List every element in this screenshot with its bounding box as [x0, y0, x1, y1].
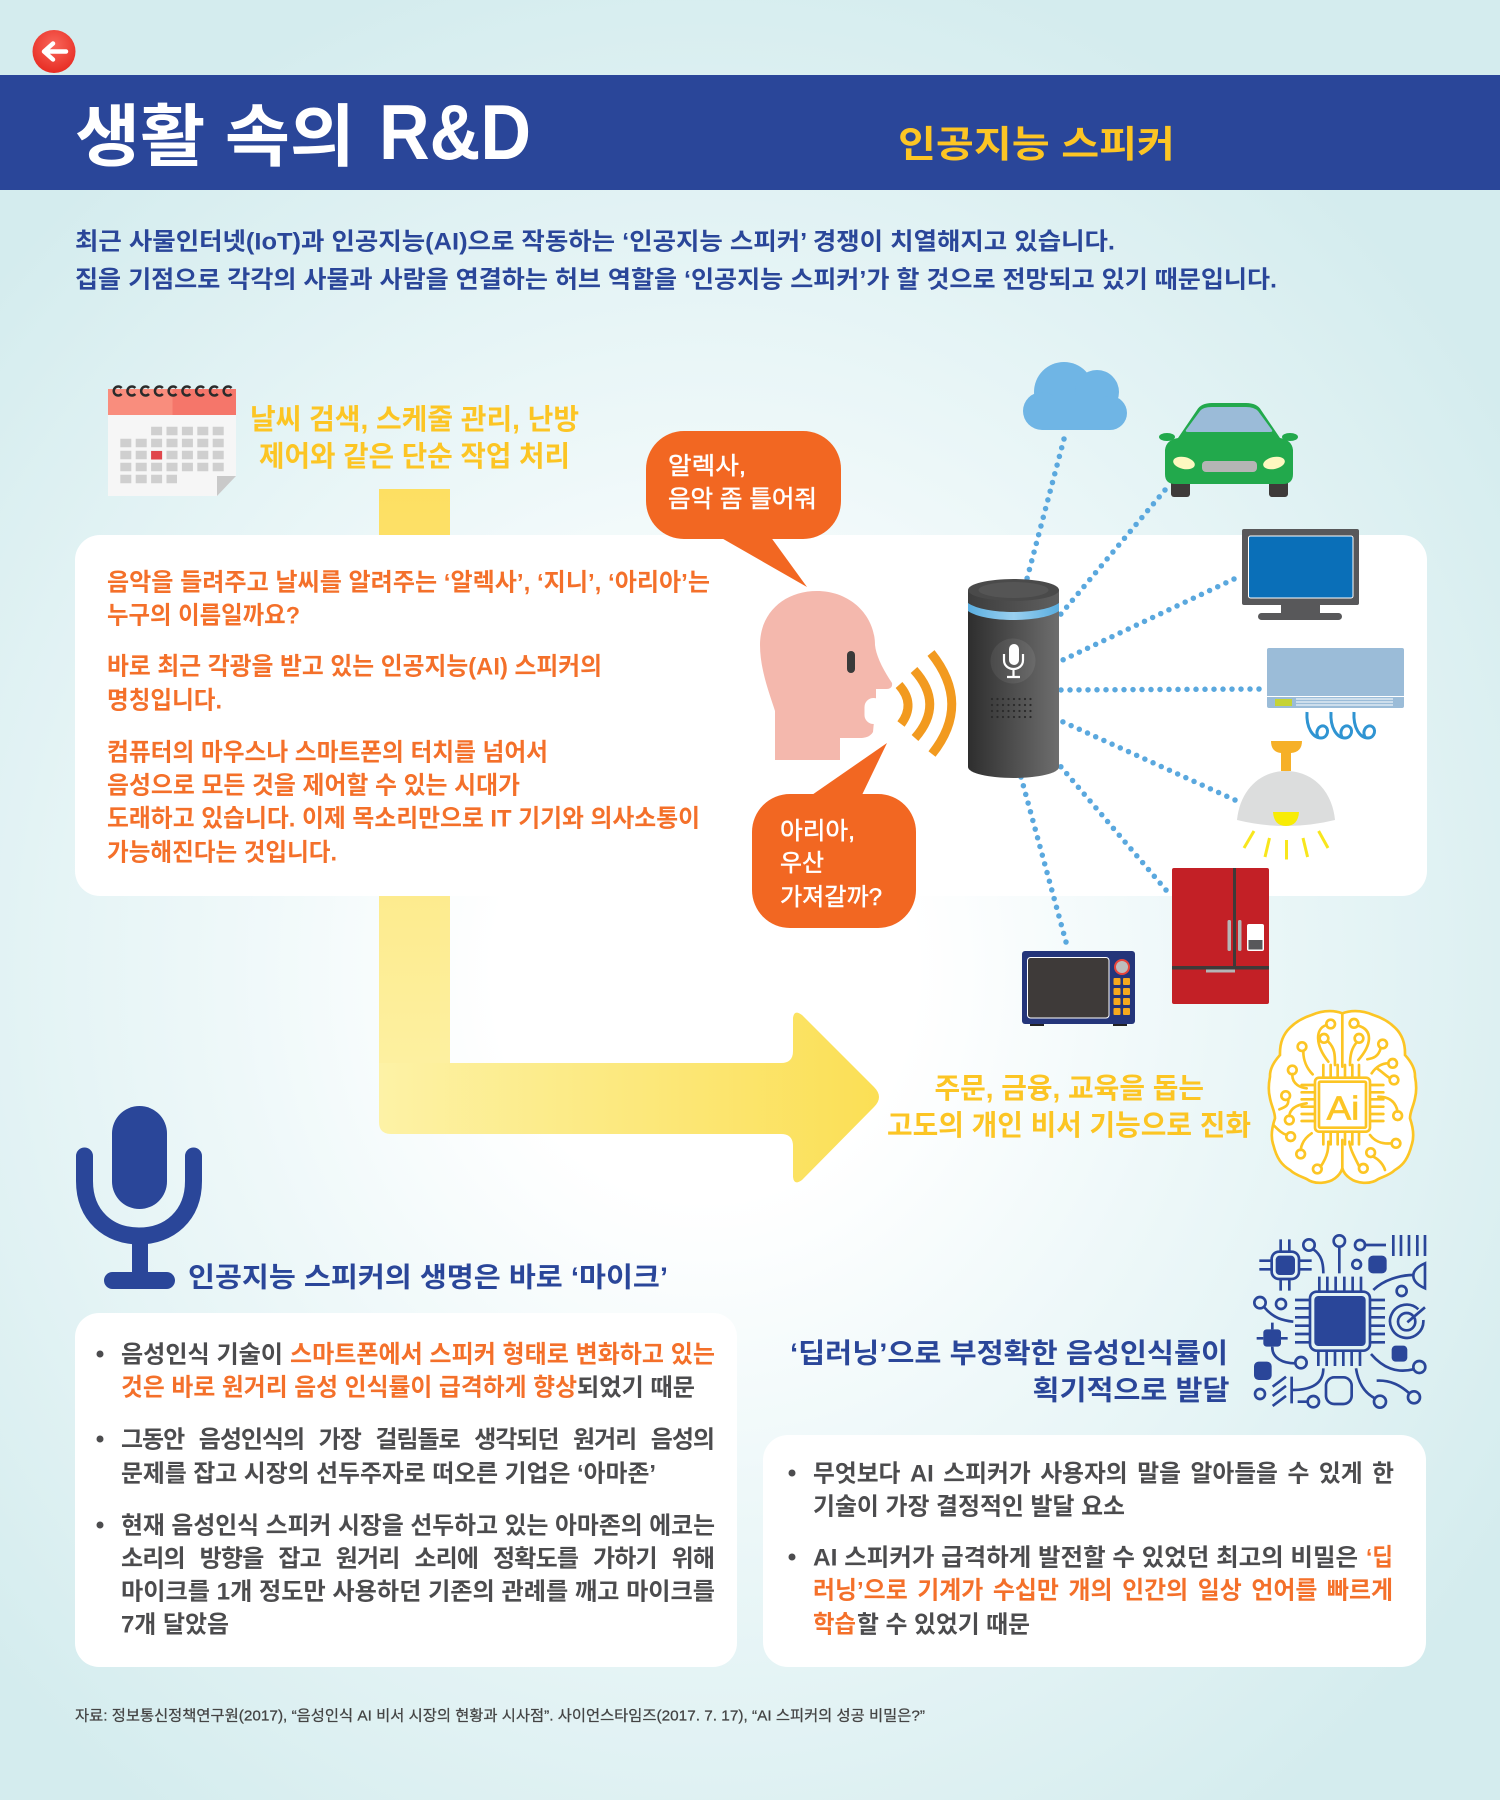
bullet: deep learning secret: 할 수 있었기 때문: [857, 1611, 1030, 1638]
heading: advanced assistant: 주문, 금융, 교육을 돕는: [934, 1073, 1204, 1105]
title: 생활 속의: [75, 99, 355, 175]
icon: ceiling lamp: [1237, 741, 1335, 860]
speech bubble: Aria: 가져갈까?: [780, 884, 882, 911]
chip label: Ai: [1327, 1090, 1359, 1127]
heading: advanced assistant: 고도의 개인 비서 기능으로 진화: [887, 1110, 1251, 1142]
bullet: key technology: 무엇보다 AI 스피커가 사용자의 말을 알아들을 수 있게 한: [813, 1460, 1394, 1487]
bullet: deep learning secret: AI 스피커가 급격하게 발전할 수 있었던 최고의 비밀은: [813, 1544, 1358, 1571]
text block: intro to AI speakers: 가능해진다는 것입니다.: [107, 838, 337, 866]
arrow: from simple tasks to personal assistant: [379, 489, 879, 1182]
text block: intro to AI speakers: 바로 최근 각광을 받고 있는 인공지능(AI) 스피커의: [107, 652, 602, 680]
header band: [0, 75, 1500, 190]
bullet: smartphone to speaker: [96, 1340, 715, 1401]
icon: microwave: [1022, 951, 1135, 1026]
icon: car: [1159, 403, 1298, 497]
icon: microphone: [84, 1106, 194, 1289]
bullet: smartphone to speaker: 음성인식 기술이: [121, 1341, 283, 1368]
bullet: deep learning secret: ‘딥: [1366, 1543, 1393, 1571]
intro text: 최근 사물인터넷(IoT)과 인공지능(AI)으로 작동하는 ‘인공지능 스피커’ 경쟁이 치열해지고 있습니다.: [75, 228, 1115, 255]
panel: deep learning details: [763, 1435, 1426, 1667]
heading: deep learning: ‘딥러닝’으로 부정확한 음성인식률이: [790, 1337, 1228, 1368]
text block: intro to AI speakers: 음성으로 모든 것을 제어할 수 있는 시대가: [107, 771, 520, 799]
text block: intro to AI speakers: 컴퓨터의 마우스나 스마트폰의 터치를 넘어서: [107, 738, 548, 766]
panel: microphone details: [75, 1313, 737, 1667]
icon: refrigerator: [1172, 868, 1269, 1004]
heading: microphone: 인공지능 스피커의 생명은 바로 ‘마이크’: [188, 1261, 668, 1292]
icon: cloud: [1023, 362, 1127, 430]
bullet: Echo: [96, 1512, 715, 1638]
source note: 자료: 정보통신정책연구원(2017), “음성인식 AI 비서 시장의 현황과 시사점”. 사이언스타임즈(2017. 7. 17), “AI 스피커의 성공 비밀은?”: [75, 1707, 925, 1724]
speech bubble: Alexa: 음악 좀 틀어줘: [668, 486, 817, 513]
heading: simple tasks: 제어와 같은 단순 작업 처리: [259, 441, 570, 473]
bullet: smartphone to speaker: 스마트폰에서 스피커 형태로 변화하고 있는: [290, 1340, 715, 1368]
speech bubble: Aria: [752, 743, 916, 928]
text block: intro to AI speakers: 도래하고 있습니다. 이제 목소리만으로 IT 기기와 의사소통이: [107, 804, 700, 832]
bullet: smartphone to speaker: 것은 바로 원거리 음성 인식률이 급격하게 향상: [121, 1373, 577, 1401]
panel: main white: [75, 535, 1427, 896]
bullet: Amazon: [96, 1426, 715, 1487]
bullet: smartphone to speaker: 되었기 때문: [577, 1374, 695, 1401]
speech bubble: Alexa: 알렉사,: [668, 453, 746, 480]
speech bubble: Aria: 아리아,: [780, 818, 855, 845]
title: R&D: [379, 88, 531, 176]
bullet: deep learning secret: [788, 1543, 1393, 1638]
heading: deep learning: 획기적으로 발달: [1032, 1374, 1230, 1405]
back button: [32, 30, 76, 73]
heading: advanced assistant: [887, 1073, 1251, 1142]
speech bubble: Alexa: [646, 431, 841, 587]
text block: intro to AI speakers: [107, 568, 710, 866]
text block: intro to AI speakers: 음악을 들려주고 날씨를 알려주는 ‘알렉사’, ‘지니’, ‘아리아’는: [107, 568, 710, 596]
text block: intro to AI speakers: 명칭입니다.: [107, 686, 222, 714]
bullet: key technology: [788, 1460, 1394, 1520]
icon: smart speaker: [968, 579, 1059, 778]
bullet: Echo: 소리의 방향을 잡고 원거리 소리에 정확도를 가하기 위해: [121, 1545, 715, 1572]
heading: simple tasks: 날씨 검색, 스케줄 관리, 난방: [250, 404, 579, 436]
bullet: Echo: 현재 음성인식 스피커 시장을 선두하고 있는 아마존의 에코는: [121, 1512, 715, 1539]
speech bubble: Aria: 우산: [780, 850, 824, 877]
heading: simple tasks: [250, 404, 579, 473]
icon: television: [1242, 529, 1359, 620]
icon: AI brain: [1269, 1011, 1416, 1183]
bullet: Amazon: 그동안 음성인식의 가장 걸림돌로 생각되던 원거리 음성의: [121, 1426, 715, 1453]
icon: speaking head: [760, 591, 892, 760]
bullet: Echo: 마이크를 1개 정도만 사용하던 기존의 관례를 깨고 마이크를: [121, 1578, 715, 1605]
icon: sound waves: [899, 653, 952, 754]
icon: air conditioner: [1267, 648, 1404, 738]
bullet: Echo: 7개 달았음: [121, 1611, 229, 1638]
bullet: deep learning secret: 러닝’으로 기계가 수십만 개의 인간의 일상 언어를 빠르게: [813, 1576, 1393, 1604]
bullet: Amazon: 문제를 잡고 시장의 선두주자로 떠오른 기업은 ‘아마존’: [121, 1460, 656, 1487]
intro text: [75, 228, 1277, 293]
heading: deep learning: [790, 1337, 1230, 1405]
dotted connection lines: [1018, 439, 1259, 942]
text block: intro to AI speakers: 누구의 이름일까요?: [107, 601, 300, 629]
bullet: key technology: 기술이 가장 결정적인 발달 요소: [813, 1493, 1125, 1520]
title: [75, 88, 531, 176]
icon: circuit chip: [1254, 1235, 1425, 1408]
intro text: 집을 기점으로 각각의 사물과 사람을 연결하는 허브 역할을 ‘인공지능 스피커’가 할 것으로 전망되고 있기 때문입니다.: [75, 266, 1277, 293]
subtitle: 인공지능 스피커: [898, 124, 1175, 165]
icon: calendar: [108, 386, 236, 496]
bullet: deep learning secret: 학습: [813, 1610, 856, 1638]
